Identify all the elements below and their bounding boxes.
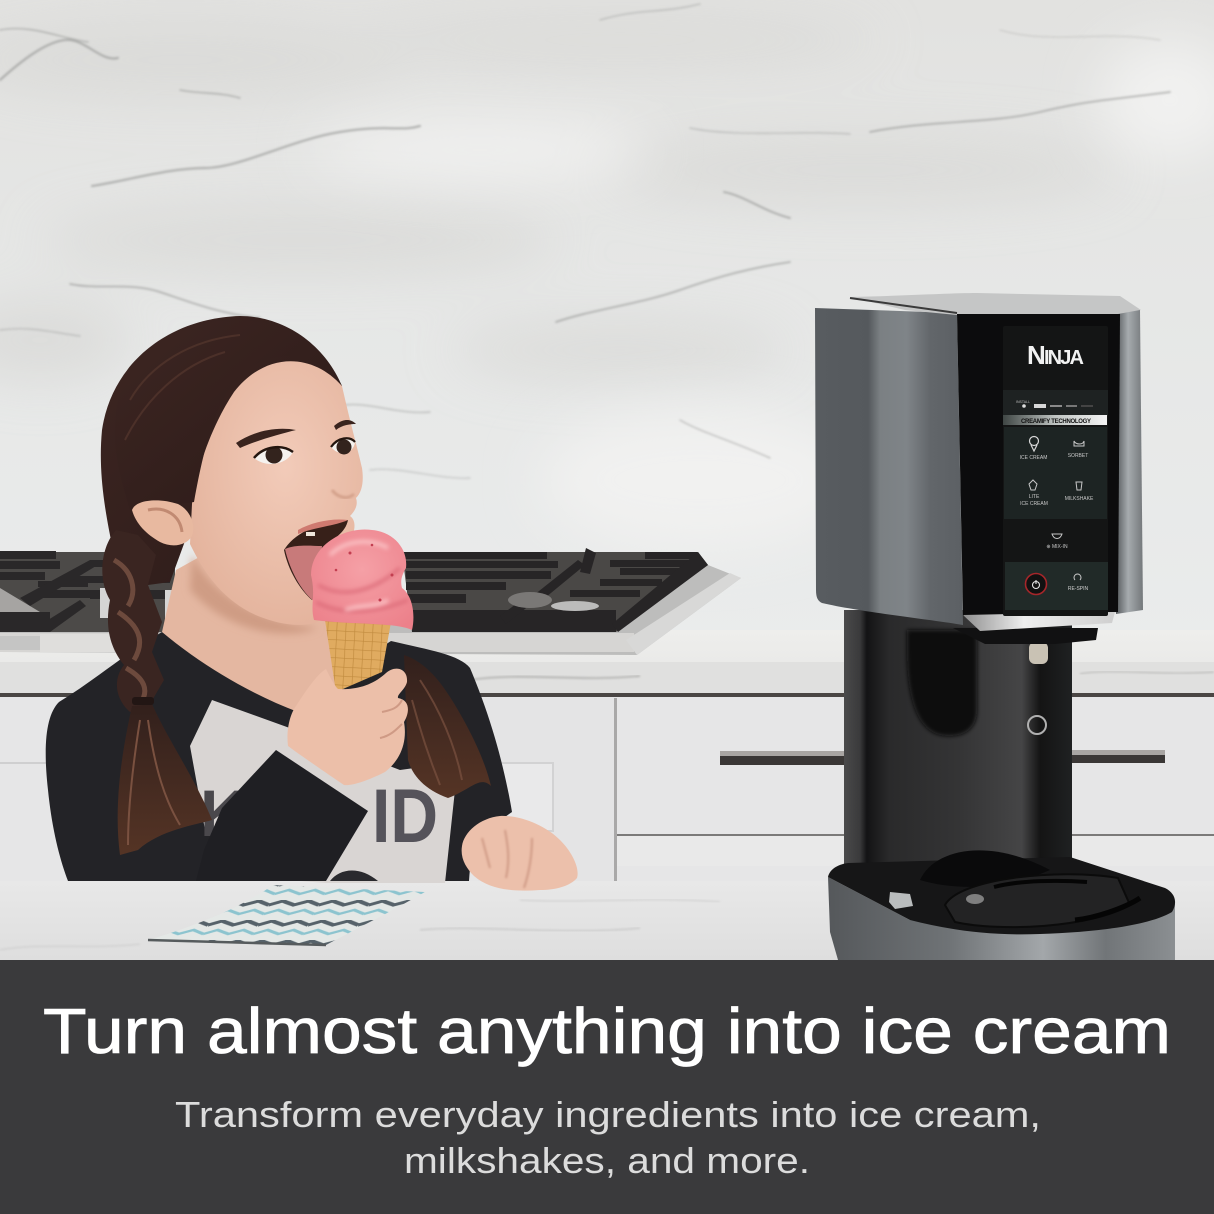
left burner grates [0, 551, 180, 652]
black front [957, 314, 1120, 616]
hand on table [462, 816, 578, 891]
cooktop stainless plate [0, 565, 741, 655]
right burner grates [402, 548, 708, 632]
subheading line 1: Transform everyday ingredients into ice cream, [175, 1094, 1041, 1135]
shirt print letter K: K [200, 776, 248, 850]
base [828, 850, 1175, 960]
power button [1026, 574, 1046, 594]
black sleeve [196, 750, 368, 881]
lower button panel [1005, 562, 1108, 610]
right silver strip [1116, 310, 1143, 614]
nose shadow [332, 490, 354, 497]
lower black tube [844, 610, 1072, 880]
program: milkshake: MILKSHAKE [1065, 496, 1094, 502]
re-spin button: RE-SPIN [1068, 586, 1089, 592]
table top [0, 881, 1214, 961]
right pigtail [404, 655, 491, 798]
ice cream cone [325, 620, 391, 692]
mix-in button [1046, 534, 1068, 550]
right eye [331, 438, 355, 454]
control glass [1003, 326, 1108, 616]
neck [162, 540, 340, 712]
right eyebrow [334, 420, 356, 430]
base black top [828, 857, 1175, 934]
headline: Turn almost anything into ice cream [43, 995, 1171, 1067]
re-spin button [1068, 574, 1089, 592]
girl eating ice cream [46, 316, 578, 891]
subheading line 2: milkshakes, and more. [404, 1140, 810, 1181]
silver left housing [815, 308, 963, 625]
kitchen cabinets [0, 697, 1214, 887]
white shirt panel [190, 700, 458, 883]
program: milkshake [1065, 482, 1094, 502]
program: lite ice cream: ICE CREAM [1020, 501, 1048, 507]
black raglan shirt [46, 632, 512, 881]
chrome trim [963, 612, 1115, 631]
drawer handles [720, 751, 846, 756]
ice cream scoops [311, 529, 413, 630]
program: sorbet: SORBET [1068, 453, 1088, 459]
top lid [850, 293, 1141, 315]
dark caption band [0, 960, 1214, 1214]
face [190, 361, 363, 625]
drive ring [945, 874, 1130, 927]
ninja logo: NINJA [1027, 340, 1084, 370]
mix-in button: ⊕ MIX-IN [1046, 544, 1068, 550]
left eyebrow [236, 429, 296, 448]
hair back [101, 316, 342, 590]
base button [889, 892, 913, 909]
hair over forehead [115, 320, 342, 510]
open mouth [284, 519, 348, 604]
shirt print letters ID: ID [372, 774, 438, 859]
program: lite ice cream [1020, 480, 1048, 507]
base silver side [828, 877, 1175, 960]
drawer dividers [617, 834, 1214, 836]
ninja ice cream maker [815, 293, 1175, 960]
gas cooktop [0, 548, 741, 655]
status panel [1003, 390, 1108, 416]
marble wall [0, 0, 1214, 660]
collar under head [953, 628, 1098, 644]
program: ice cream [1020, 436, 1047, 461]
braid tail [118, 704, 212, 855]
left door [478, 698, 615, 881]
left eye [254, 446, 293, 464]
creamify bar: CREAMIFY TECHNOLOGY [1021, 419, 1091, 425]
patterned napkin [148, 885, 425, 945]
countertop [0, 630, 1214, 697]
hand holding cone [287, 669, 408, 785]
program buttons panel [1004, 427, 1107, 519]
program: ice cream: ICE CREAM [1020, 455, 1047, 461]
creamify bar [1003, 415, 1107, 425]
program: sorbet [1068, 441, 1088, 459]
left braid [102, 530, 212, 855]
program: lite ice cream: LITE [1029, 494, 1040, 500]
shirt [46, 632, 512, 883]
status panel: INSTALL [1016, 400, 1030, 404]
ear [132, 500, 193, 545]
